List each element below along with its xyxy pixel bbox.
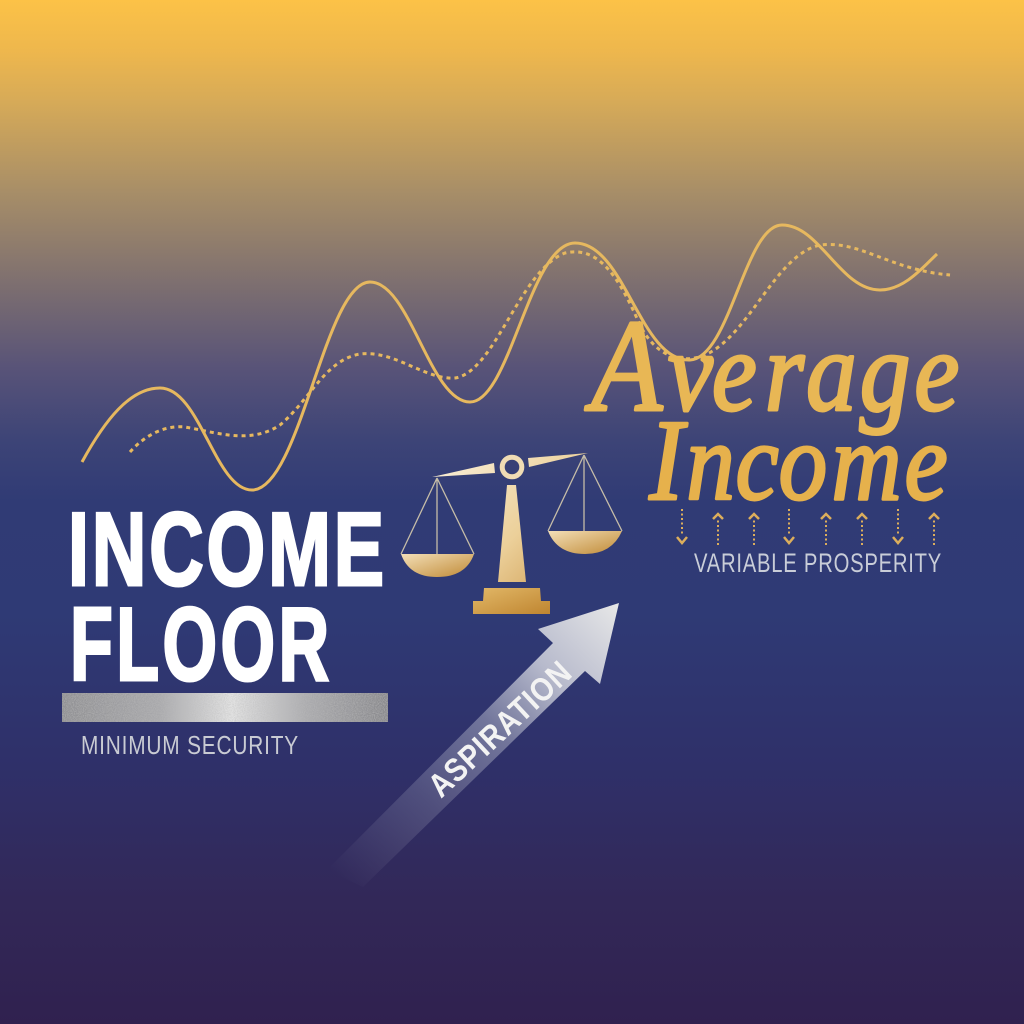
label: minimum security: MINIMUM SECURITY: [81, 730, 299, 760]
label: variable prosperity: VARIABLE PROSPERITY: [694, 548, 942, 578]
solid income line: [82, 225, 937, 490]
arrow: aspiration: [327, 603, 619, 887]
title: income floor: [68, 492, 387, 702]
title: average income: [585, 292, 959, 524]
arrow: aspiration: ASPIRATION: [421, 653, 579, 804]
title: average income: Income: [649, 396, 948, 524]
title: income floor: INCOME: [68, 492, 387, 608]
silver floor bar: [62, 693, 388, 722]
title: average income: Average: [585, 292, 959, 439]
title: income floor: FLOOR: [70, 586, 333, 702]
variability arrows: [677, 509, 939, 545]
icon: balance scale: [401, 453, 622, 614]
dotted average line: [130, 244, 950, 452]
